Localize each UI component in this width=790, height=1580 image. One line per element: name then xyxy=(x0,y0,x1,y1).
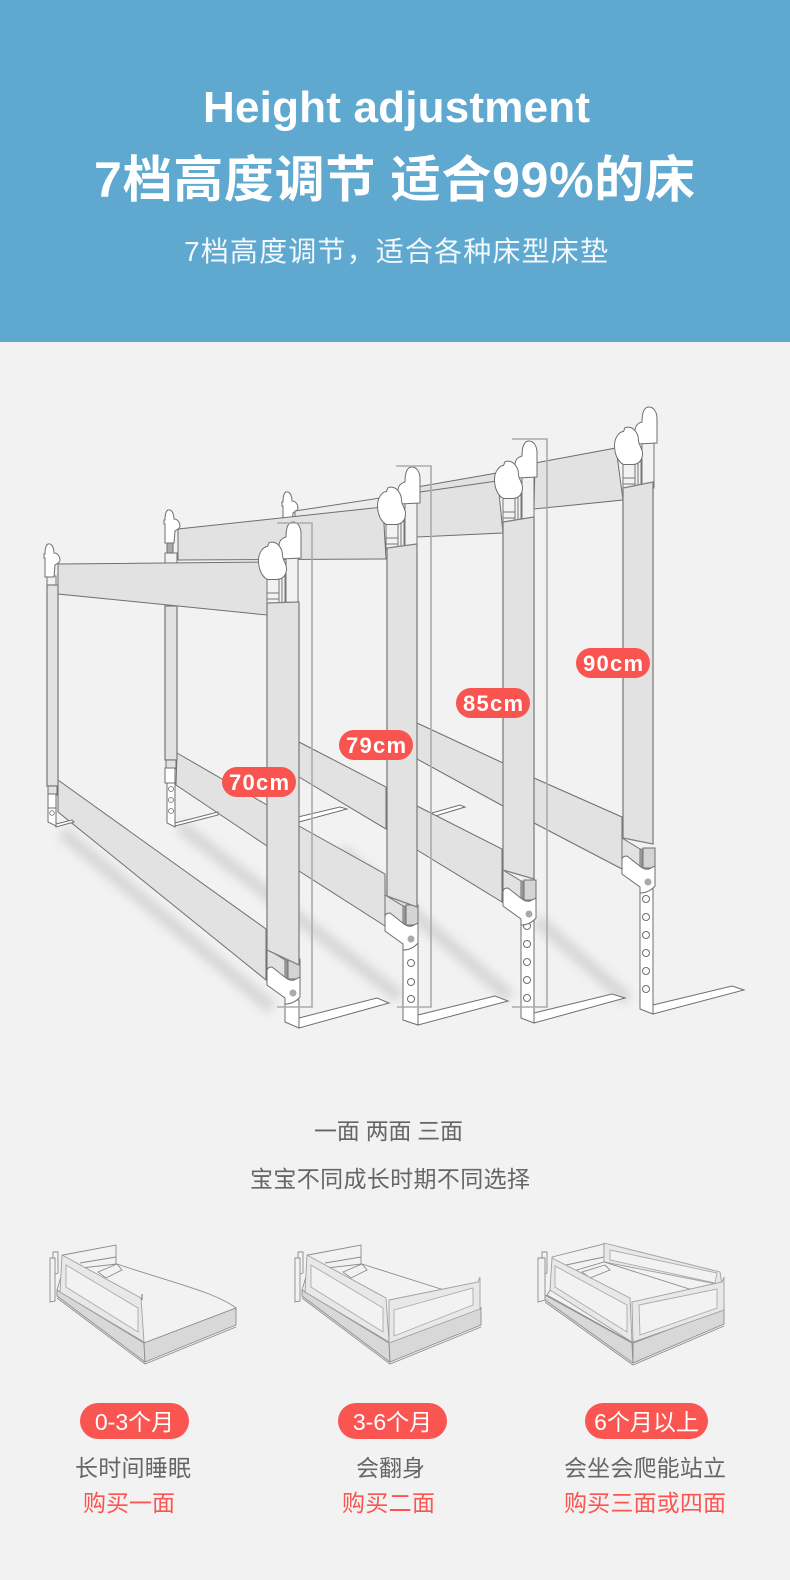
age pill: 3-6个月 xyxy=(353,1409,432,1435)
icon: bed with two rails xyxy=(295,1245,481,1364)
label 79cm xyxy=(339,730,413,760)
rail 90cm xyxy=(417,407,744,1014)
main heading: 7档高度调节 适合99%的床 xyxy=(94,152,695,208)
stage 3: over 6 months xyxy=(564,1403,726,1516)
height bracket 79cm xyxy=(396,466,431,1007)
age pill xyxy=(585,1403,708,1439)
recommendation: 购买一面 xyxy=(83,1490,175,1516)
rail 79cm xyxy=(164,467,508,1025)
holes xyxy=(524,922,530,1002)
holes xyxy=(642,896,650,992)
stage 2: 3-6 months xyxy=(338,1403,447,1516)
section subheading: 宝宝不同成长时期不同选择 xyxy=(250,1166,530,1192)
diagram: bed rail height adjustment xyxy=(44,407,744,1028)
stage 1: 0-3 months xyxy=(75,1403,191,1516)
section heading: one two three sides: 一面 两面 三面 xyxy=(314,1118,463,1144)
holes xyxy=(408,960,414,1002)
age pill: 6个月以上 xyxy=(594,1409,699,1435)
rear post xyxy=(164,510,218,827)
recommendation: 购买二面 xyxy=(342,1490,435,1516)
rail 70cm xyxy=(44,522,389,1028)
age pill: 0-3个月 xyxy=(95,1409,174,1435)
label 70cm: 70cm xyxy=(229,770,289,795)
background foot pieces xyxy=(298,805,465,822)
English heading: Height adjustment xyxy=(203,83,590,132)
behaviour: 会翻身 xyxy=(356,1455,425,1481)
sub heading: 7档高度调节，适合各种床型床垫 xyxy=(184,236,608,267)
label 70cm xyxy=(222,767,296,797)
floor shadows xyxy=(62,826,628,1008)
label 90cm: 90cm xyxy=(583,651,643,676)
front post xyxy=(44,544,74,827)
recommendation: 购买三面或四面 xyxy=(564,1490,726,1516)
icon: bed with three rails xyxy=(538,1243,724,1365)
header banner xyxy=(0,0,790,342)
label 85cm: 85cm xyxy=(463,691,523,716)
height bracket 70cm xyxy=(277,523,312,1007)
label 90cm xyxy=(576,648,650,678)
behaviour: 会坐会爬能站立 xyxy=(564,1455,726,1481)
height bracket 85cm xyxy=(512,439,547,1007)
rail 85cm xyxy=(417,441,625,1023)
behaviour: 长时间睡眠 xyxy=(75,1455,191,1481)
icon: bed with one rail xyxy=(50,1245,236,1364)
label 85cm xyxy=(456,688,530,718)
label 79cm: 79cm xyxy=(346,733,406,758)
